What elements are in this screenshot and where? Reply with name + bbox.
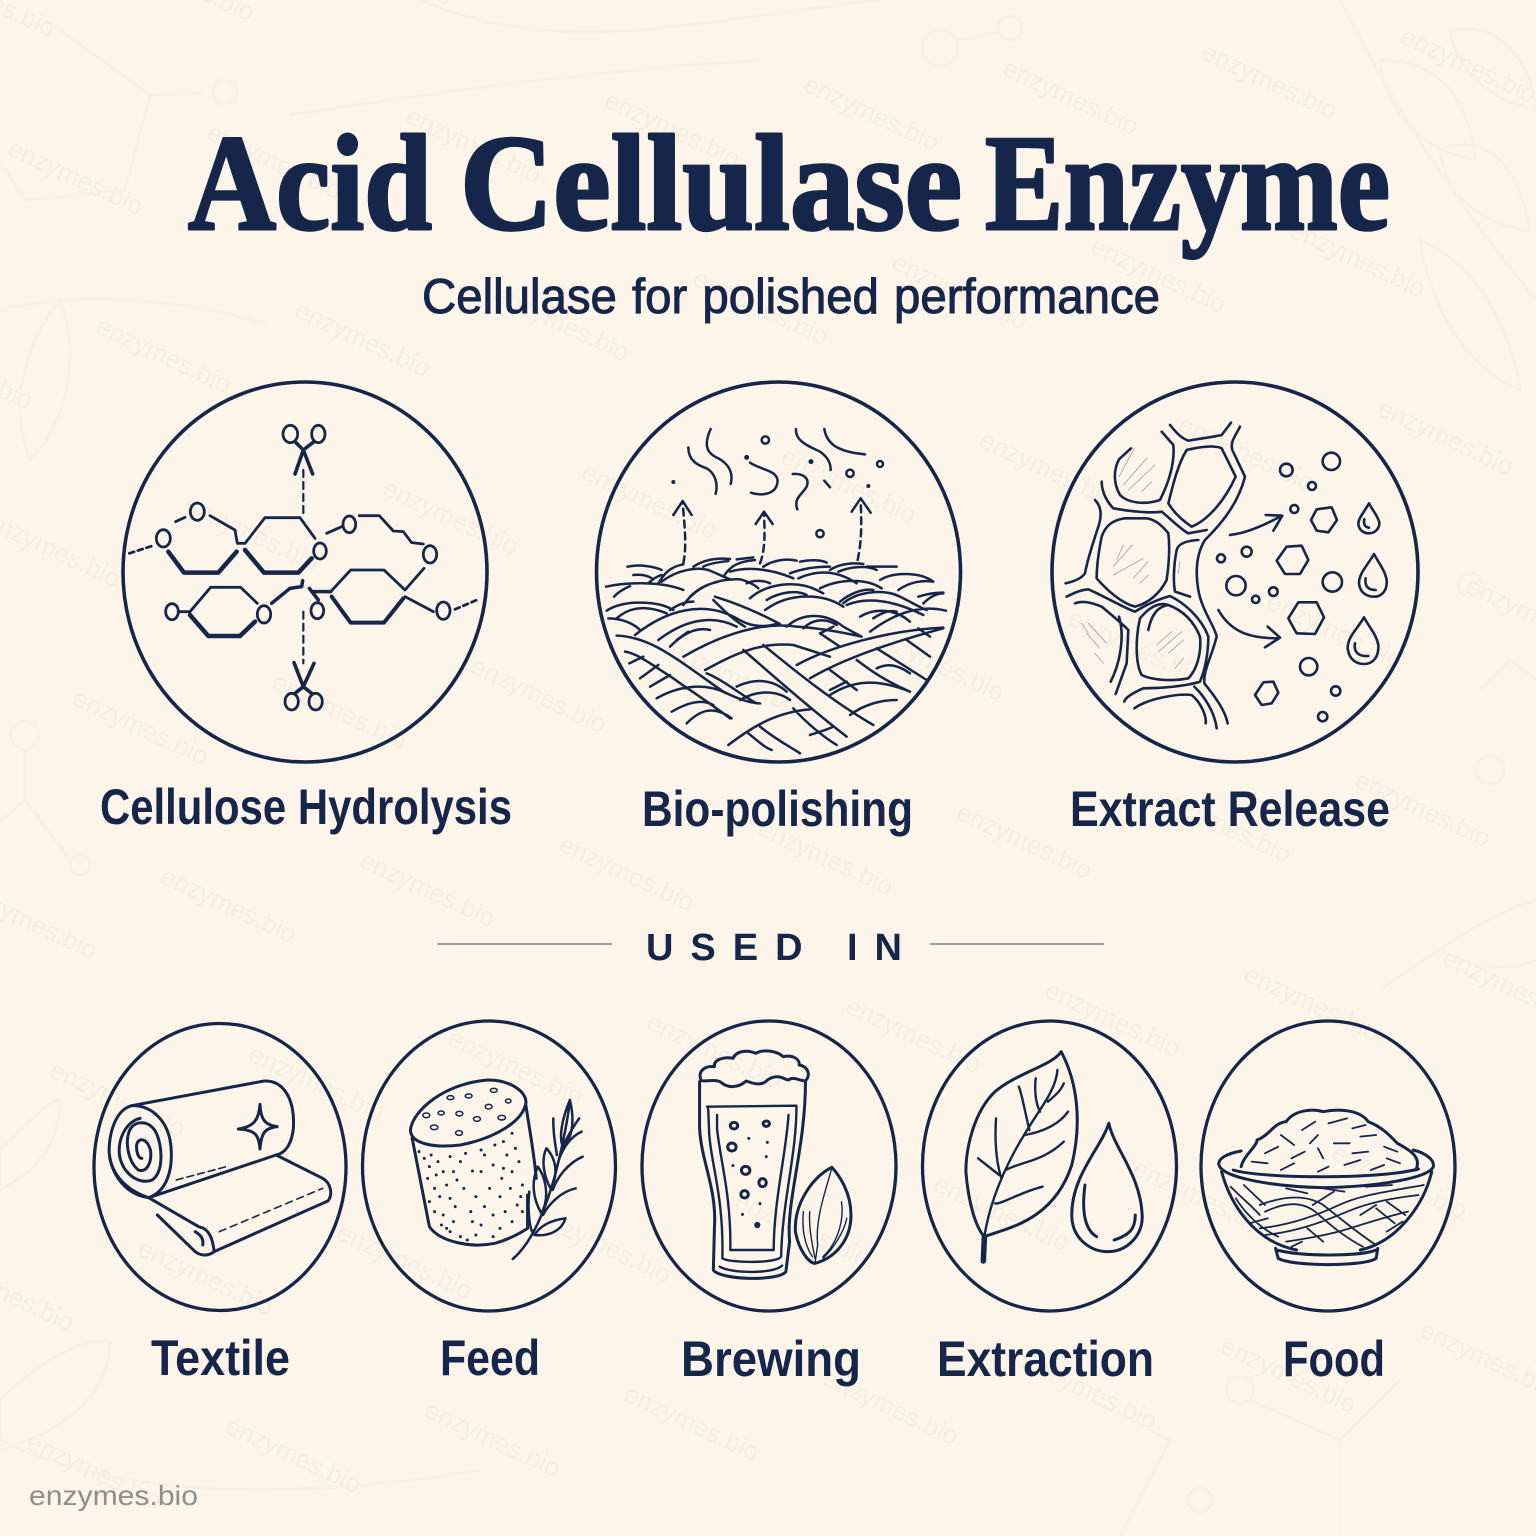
- watermark pattern: enzymes.bio: [420, 1394, 565, 1483]
- icon: woven fabric releasing fibers: [596, 382, 960, 762]
- icon: loose fibers: [673, 429, 883, 537]
- watermark pattern: enzymes.bio: [887, 246, 1032, 335]
- watermark pattern: enzymes.bio: [332, 1216, 477, 1305]
- label: Cellulose Hydrolysis: [100, 779, 512, 835]
- watermark pattern: enzymes.bio: [753, 812, 898, 901]
- icon: upper scissors: [283, 425, 325, 474]
- watermark pattern: enzymes.bio: [489, 278, 634, 367]
- label: Extract Release: [1070, 781, 1390, 837]
- icon: cellulose chain with scissors: [123, 382, 487, 762]
- watermark pattern: enzymes.bio: [1285, 214, 1430, 303]
- panel: food: [1201, 1021, 1455, 1387]
- label: Food: [1283, 1331, 1385, 1387]
- icon: feed block with wheat: [362, 1021, 616, 1311]
- watermark pattern: enzymes.bio: [1350, 764, 1495, 853]
- subtitle: Cellulase for polished performance: [422, 270, 1160, 324]
- watermark pattern: enzymes.bio: [554, 828, 699, 917]
- watermark pattern: enzymes.bio: [688, 262, 833, 351]
- watermark pattern: enzymes.bio: [1040, 974, 1185, 1063]
- title: Cellulase: [460, 107, 962, 259]
- label: Feed: [440, 1330, 540, 1386]
- watermark pattern: enzymes.bio: [619, 1378, 764, 1467]
- grain: [795, 1167, 851, 1263]
- watermark pattern: enzymes.bio: [179, 488, 324, 577]
- watermark pattern: enzymes.bio: [267, 666, 412, 755]
- arrow: lower: [1218, 610, 1280, 647]
- watermark pattern: enzymes.bio: [600, 84, 745, 173]
- watermark pattern: enzymes.bio: [1262, 586, 1407, 675]
- title: [188, 107, 1390, 259]
- icon: lower scissors: [285, 663, 322, 710]
- icon: fabric roll: [94, 1024, 346, 1310]
- watermark pattern: enzymes.bio: [156, 860, 301, 949]
- watermark pattern: enzymes.bio: [466, 650, 611, 739]
- particles: [1217, 453, 1342, 721]
- watermark pattern: enzymes.bio: [3, 132, 148, 221]
- watermark pattern: enzymes.bio: [290, 294, 435, 383]
- watermark pattern: enzymes.bio: [1086, 230, 1231, 319]
- watermark pattern: enzymes.bio: [998, 52, 1143, 141]
- watermark pattern: enzymes.bio: [68, 682, 213, 771]
- watermark pattern: enzymes.bio: [929, 1168, 1074, 1257]
- watermark pattern: enzymes.bio: [818, 1362, 963, 1451]
- watermark pattern: enzymes.bio: [378, 472, 523, 561]
- icon: bowl of food: [1201, 1021, 1455, 1311]
- watermark pattern: enzymes.bio: [221, 1410, 366, 1499]
- watermark pattern: enzymes.bio: [1216, 1330, 1361, 1419]
- section heading: used in: USED IN: [646, 927, 902, 969]
- watermark pattern: enzymes.bio: [841, 990, 986, 1079]
- watermark pattern: enzymes.bio: [22, 1426, 167, 1515]
- watermark pattern: enzymes.bio: [1063, 602, 1208, 691]
- weave: [606, 557, 946, 753]
- panel: feed: [362, 1021, 616, 1386]
- panel: brewing: [642, 1021, 896, 1387]
- watermark pattern: enzymes.bio: [730, 1184, 875, 1273]
- panel: extract release: [1052, 382, 1418, 837]
- watermark pattern: enzymes.bio: [45, 1054, 190, 1143]
- watermark pattern: enzymes.bio: [642, 1006, 787, 1095]
- drop: [1072, 1123, 1142, 1252]
- watermark pattern: enzymes.bio: [133, 1232, 278, 1321]
- footer brand: enzymes.bio: [29, 1480, 198, 1511]
- watermark pattern: enzymes.bio: [975, 424, 1120, 513]
- panel: textile: [94, 1024, 346, 1386]
- watermark pattern: enzymes.bio: [952, 796, 1097, 885]
- watermark pattern: enzymes.bio: [355, 844, 500, 933]
- arrow: right: [852, 498, 871, 560]
- icon: beer glass and grain: [642, 1021, 896, 1311]
- watermark pattern: enzymes.bio: [1197, 36, 1342, 125]
- label: Textile: [151, 1330, 290, 1386]
- watermark pattern: enzymes.bio: [776, 440, 921, 529]
- watermark pattern: enzymes.bio: [91, 310, 236, 399]
- mound: [1241, 1110, 1417, 1170]
- arrow: left: [673, 501, 692, 563]
- watermark pattern: enzymes.bio: [1151, 780, 1296, 869]
- watermark pattern: enzymes.bio: [1017, 1346, 1162, 1435]
- panel: bio-polishing: [596, 382, 960, 837]
- watermark pattern: enzymes.bio: [799, 68, 944, 157]
- watermark pattern: enzymes.bio: [443, 1022, 588, 1111]
- watermark pattern: enzymes.bio: [1128, 1152, 1273, 1241]
- label: Bio-polishing: [642, 781, 913, 837]
- watermark pattern: enzymes.bio: [864, 618, 1009, 707]
- watermark pattern: enzymes.bio: [1327, 1136, 1472, 1225]
- label: Extraction: [937, 1331, 1154, 1387]
- watermark pattern: enzymes.bio: [531, 1200, 676, 1289]
- label: Brewing: [681, 1331, 861, 1387]
- watermark pattern: enzymes.bio: [244, 1038, 389, 1127]
- icon: plant cell wall releasing extract: [1052, 382, 1418, 762]
- foam: [700, 1051, 808, 1087]
- cell hatching: [1082, 448, 1183, 668]
- hexagons: [1255, 507, 1337, 705]
- arrow: centre: [756, 512, 773, 563]
- panel: cellulose hydrolysis: [100, 382, 512, 835]
- icon: leaf and drop: [922, 1021, 1176, 1311]
- droplets: [1348, 503, 1387, 664]
- leaf: [966, 1052, 1077, 1237]
- arrow: upper: [1230, 515, 1282, 535]
- watermark pattern: enzymes.bio: [1174, 408, 1319, 497]
- watermark pattern: enzymes.bio: [665, 634, 810, 723]
- watermark pattern: enzymes.bio: [401, 100, 546, 189]
- title: Acid: [188, 107, 432, 259]
- watermark pattern: enzymes.bio: [1373, 392, 1518, 481]
- watermark pattern: enzymes.bio: [202, 116, 347, 205]
- panel: extraction: [922, 1021, 1176, 1387]
- watermark pattern: enzymes.bio: [577, 456, 722, 545]
- title: Enzyme: [985, 107, 1390, 259]
- watermark pattern: enzymes.bio: [1239, 958, 1384, 1047]
- plant cells: [1066, 423, 1245, 728]
